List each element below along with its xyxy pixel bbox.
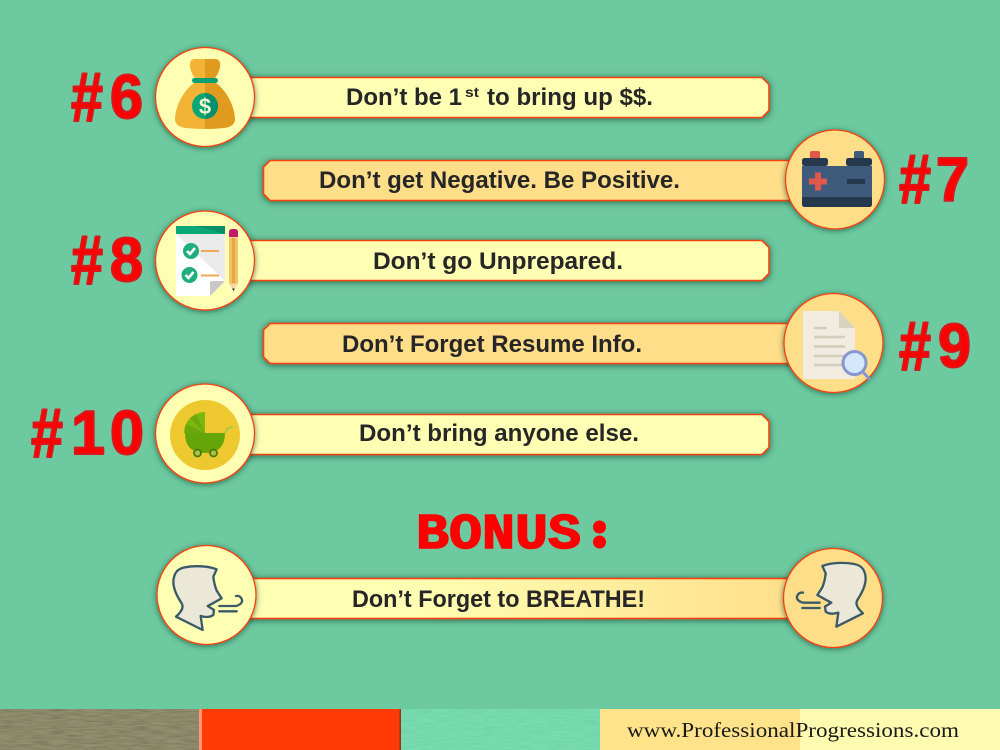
number 7 [899, 140, 969, 218]
number 10: # [31, 394, 63, 472]
bar 6 [240, 78, 769, 118]
number 9 [899, 307, 971, 385]
number 6: # [71, 58, 103, 136]
bonus text: Don’t Forget to BREATHE! [352, 586, 645, 613]
number 7: 7 [936, 146, 969, 215]
left circle [157, 546, 256, 644]
text 6: to bring up $$. [487, 84, 653, 111]
circle 9 [784, 294, 883, 392]
text 10: Don’t bring anyone else. [359, 420, 639, 447]
panel: item 9 [264, 294, 971, 392]
number 6 [71, 58, 143, 136]
circle 10 [156, 384, 254, 483]
text 6: Don’t be 1 [346, 84, 462, 111]
number 8: 8 [110, 226, 143, 295]
bonus bar [240, 578, 800, 618]
text 9: Don’t Forget Resume Info. [342, 331, 642, 358]
icon: money bag: $ [199, 94, 211, 119]
panel: bonus breathe [157, 546, 882, 648]
number 8: # [71, 221, 103, 299]
bar 8 [240, 240, 769, 280]
circle 7 [786, 130, 884, 229]
icon: head breathing out, right [797, 563, 866, 627]
text 6 [346, 84, 653, 111]
right circle [784, 548, 882, 648]
text 6: st [465, 84, 479, 100]
icon: battery [802, 151, 872, 207]
footer colour strip [0, 709, 1000, 750]
number 6: 6 [110, 63, 143, 132]
panel: item 8 [71, 211, 769, 310]
number 10: 1 [71, 399, 105, 468]
number 9: # [899, 307, 931, 385]
number 10 [31, 394, 144, 472]
circle 8 [156, 211, 254, 310]
bar 10 [240, 414, 769, 454]
bar 9 [264, 324, 800, 364]
circle 6 [156, 48, 254, 146]
number 7: # [899, 140, 931, 218]
number 8 [71, 221, 143, 299]
number 10: 0 [110, 399, 144, 468]
heading: bonus: BONUS [416, 507, 581, 564]
icon: document with magnifier [803, 311, 870, 380]
website url: www.ProfessionalProgressions.com [627, 718, 959, 742]
icon: baby stroller [170, 400, 240, 470]
panel: item 6 [71, 48, 769, 146]
text 7: Don’t get Negative. Be Positive. [319, 167, 680, 194]
panel: item 10 [31, 384, 769, 483]
number 9: 9 [938, 312, 971, 381]
text 8: Don’t go Unprepared. [373, 248, 623, 275]
icon: checklist and pencil [176, 226, 238, 296]
icon: head breathing out, left [173, 566, 242, 630]
panel: item 7 [264, 130, 969, 229]
bar 7 [264, 160, 800, 200]
icon: money bag [175, 59, 235, 129]
